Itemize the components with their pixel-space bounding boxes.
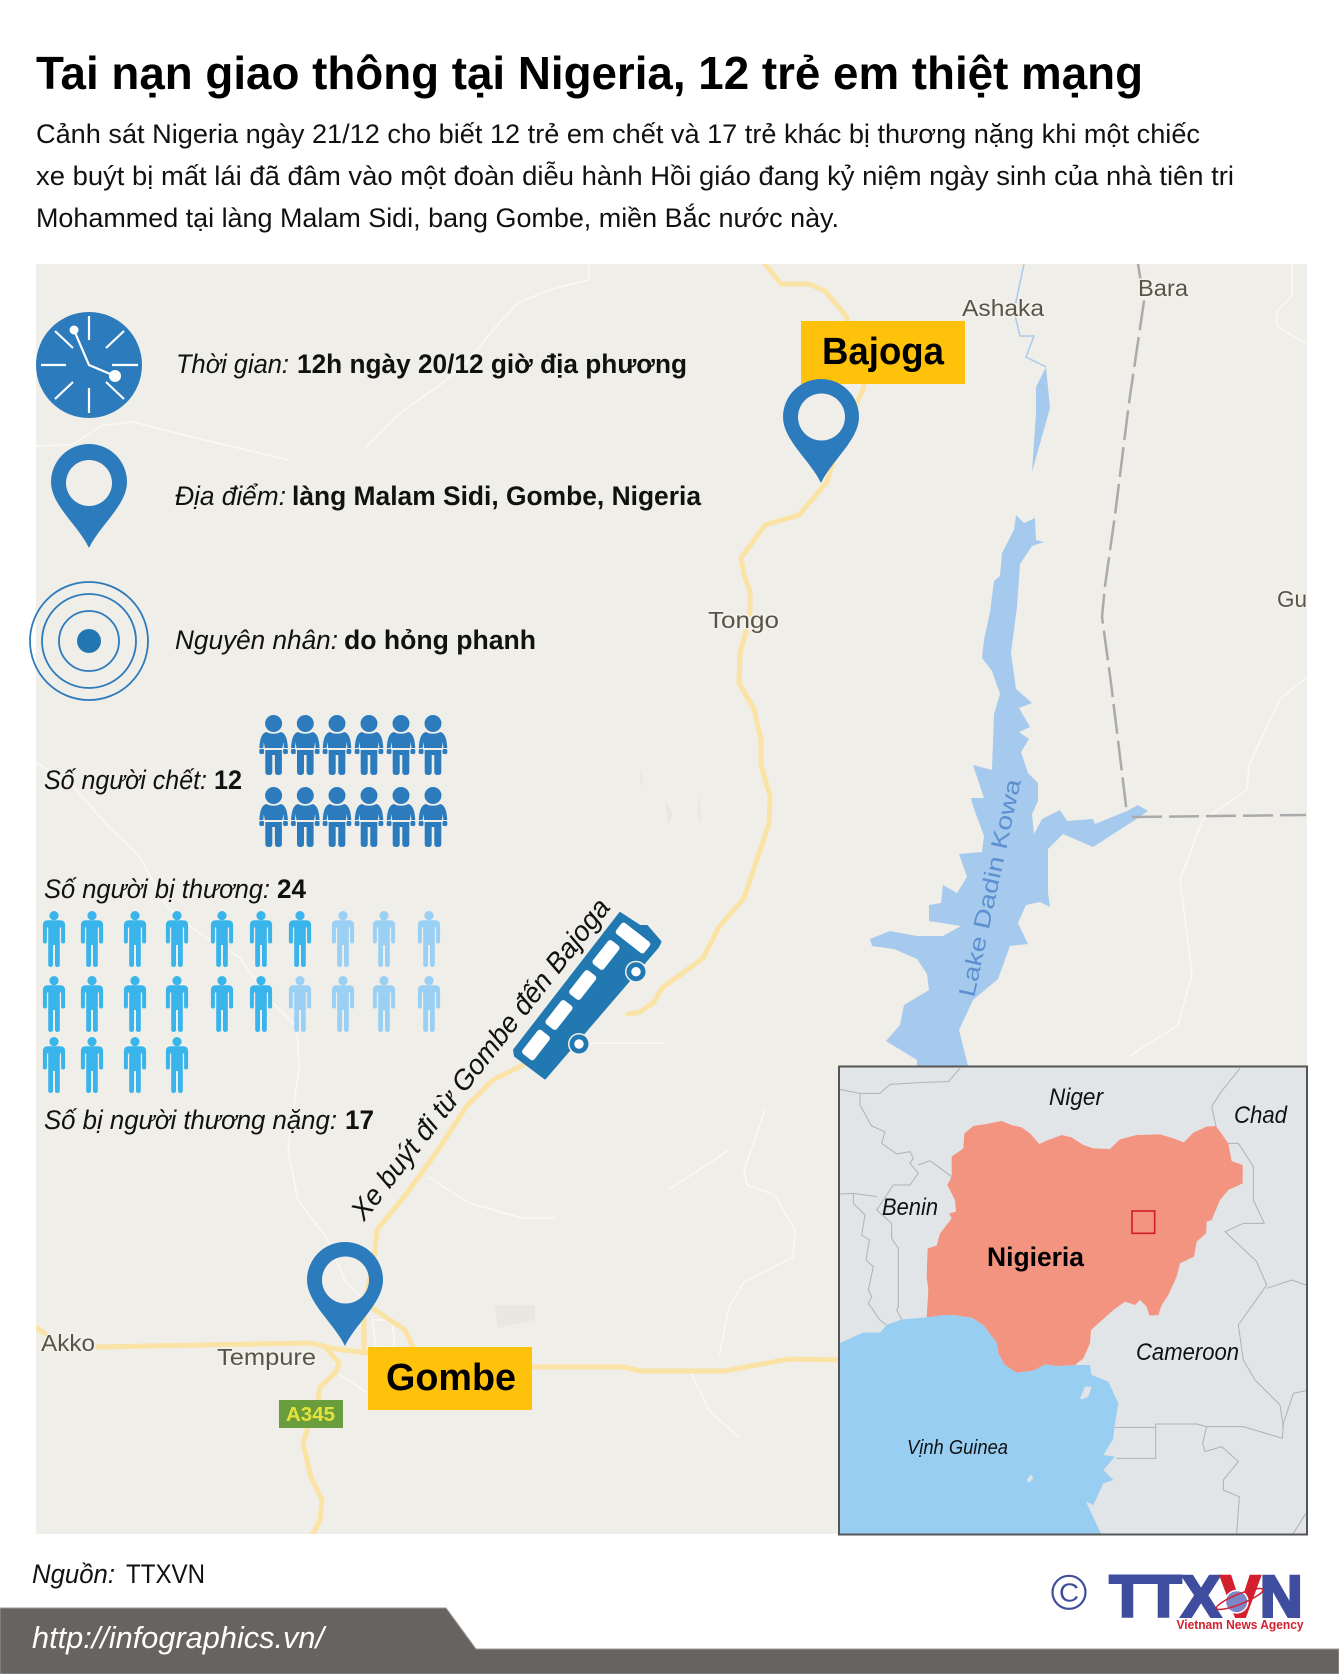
place label: Akko: Akko [41,1330,95,1356]
main road [37,264,864,1534]
label box: Gombe: Gombe [386,1357,516,1399]
label: Benin: Benin [882,1194,938,1221]
label: Cameroon: Cameroon [1136,1339,1239,1366]
place label: Ashaka: Ashaka [962,295,1044,321]
panel: road map [36,264,1307,1534]
state boundary [1102,264,1306,817]
icon: copyright: C [1059,1578,1079,1608]
source text: TTXVN [126,1559,205,1589]
injured label: Số người bị thương: [44,874,270,904]
seriously injured label: Số bị người thương nặng: [44,1105,337,1135]
place label: Tempure: Tempure [217,1344,316,1370]
nigeria shape [927,1121,1243,1373]
red locator square [1132,1211,1155,1233]
label box: Bajoga: Bajoga [822,331,945,373]
gulf of guinea [837,1315,1118,1535]
place label: Tongo: Tongo [708,607,779,633]
pin: Gombe [307,1242,383,1346]
footer band [0,1608,1339,1674]
label: Chad: Chad [1234,1102,1288,1129]
footer url: http://infographics.vn/ [32,1620,327,1655]
icon: copyright [1052,1576,1086,1609]
minor white roads [36,264,1306,1438]
place label: Gu: Gu [1277,586,1307,612]
source text [32,1559,205,1589]
label: Niger: Niger [1049,1084,1104,1111]
injured label: 24 [277,874,306,904]
logo: TTXVN: TTXVN [1110,1564,1302,1630]
lake [870,515,1148,1070]
deaths label: Số người chết: [44,765,207,795]
time text: 12h ngày 20/12 giờ địa phương [297,349,687,379]
intro text block: Cảnh sát Nigeria ngày 21/12 cho biết 12 trẻ em chết và 17 trẻ khác bị thương nặng khi một chiếc [36,119,1200,149]
logo: TTXVN: Vietnam News Agency [1176,1617,1304,1632]
time text: Thời gian: [176,349,289,379]
deaths label: 12 [214,765,242,795]
cause text: Nguyên nhân: [175,625,338,655]
intro text block: xe buýt bị mất lái đã đâm vào một đoàn diễu hành Hồi giáo đang kỷ niệm ngày sinh của nhà tiên tri [36,160,1234,191]
panel: inset locator map [837,1066,1308,1536]
place text: làng Malam Sidi, Gombe, Nigeria [292,481,702,511]
route label: Xe buýt đi từ Gombe đến Bajoga [344,892,616,1226]
country borders [839,1068,1306,1533]
label: Nigieria: Nigieria [987,1242,1085,1272]
pin: Bajoga [783,379,859,483]
lake label: Lake Dadin Kowa [953,776,1026,999]
river [1014,264,1046,367]
source text: Nguồn: [32,1559,115,1589]
title: Tai nạn giao thông tại Nigeria, 12 trẻ em thiệt mạng [36,47,1143,99]
icon: bus [514,913,660,1078]
label: Gulf of Guinea: Vịnh Guinea [907,1437,1008,1459]
cause text: do hỏng phanh [344,625,536,655]
pictogram: 24 injured [43,911,440,1093]
lake upper arm [1032,367,1050,472]
intro text block: Mohammed tại làng Malam Sidi, bang Gombe, miền Bắc nước này. [36,202,839,233]
icon: clock [36,312,142,418]
label box: Gombe [368,1347,532,1410]
place text: Địa điểm: [175,481,286,511]
icon: concentric target [30,582,148,700]
label box: Bajoga [801,321,965,384]
place label: Bara: Bara [1138,275,1188,301]
seriously injured label: 17 [345,1105,374,1135]
pictogram: 12 deaths [259,715,447,847]
cause text [175,625,536,655]
icon: location pin [51,444,127,548]
intro text block [36,119,1234,233]
road sign A345: A345 [286,1404,335,1426]
road sign A345 [279,1400,343,1428]
